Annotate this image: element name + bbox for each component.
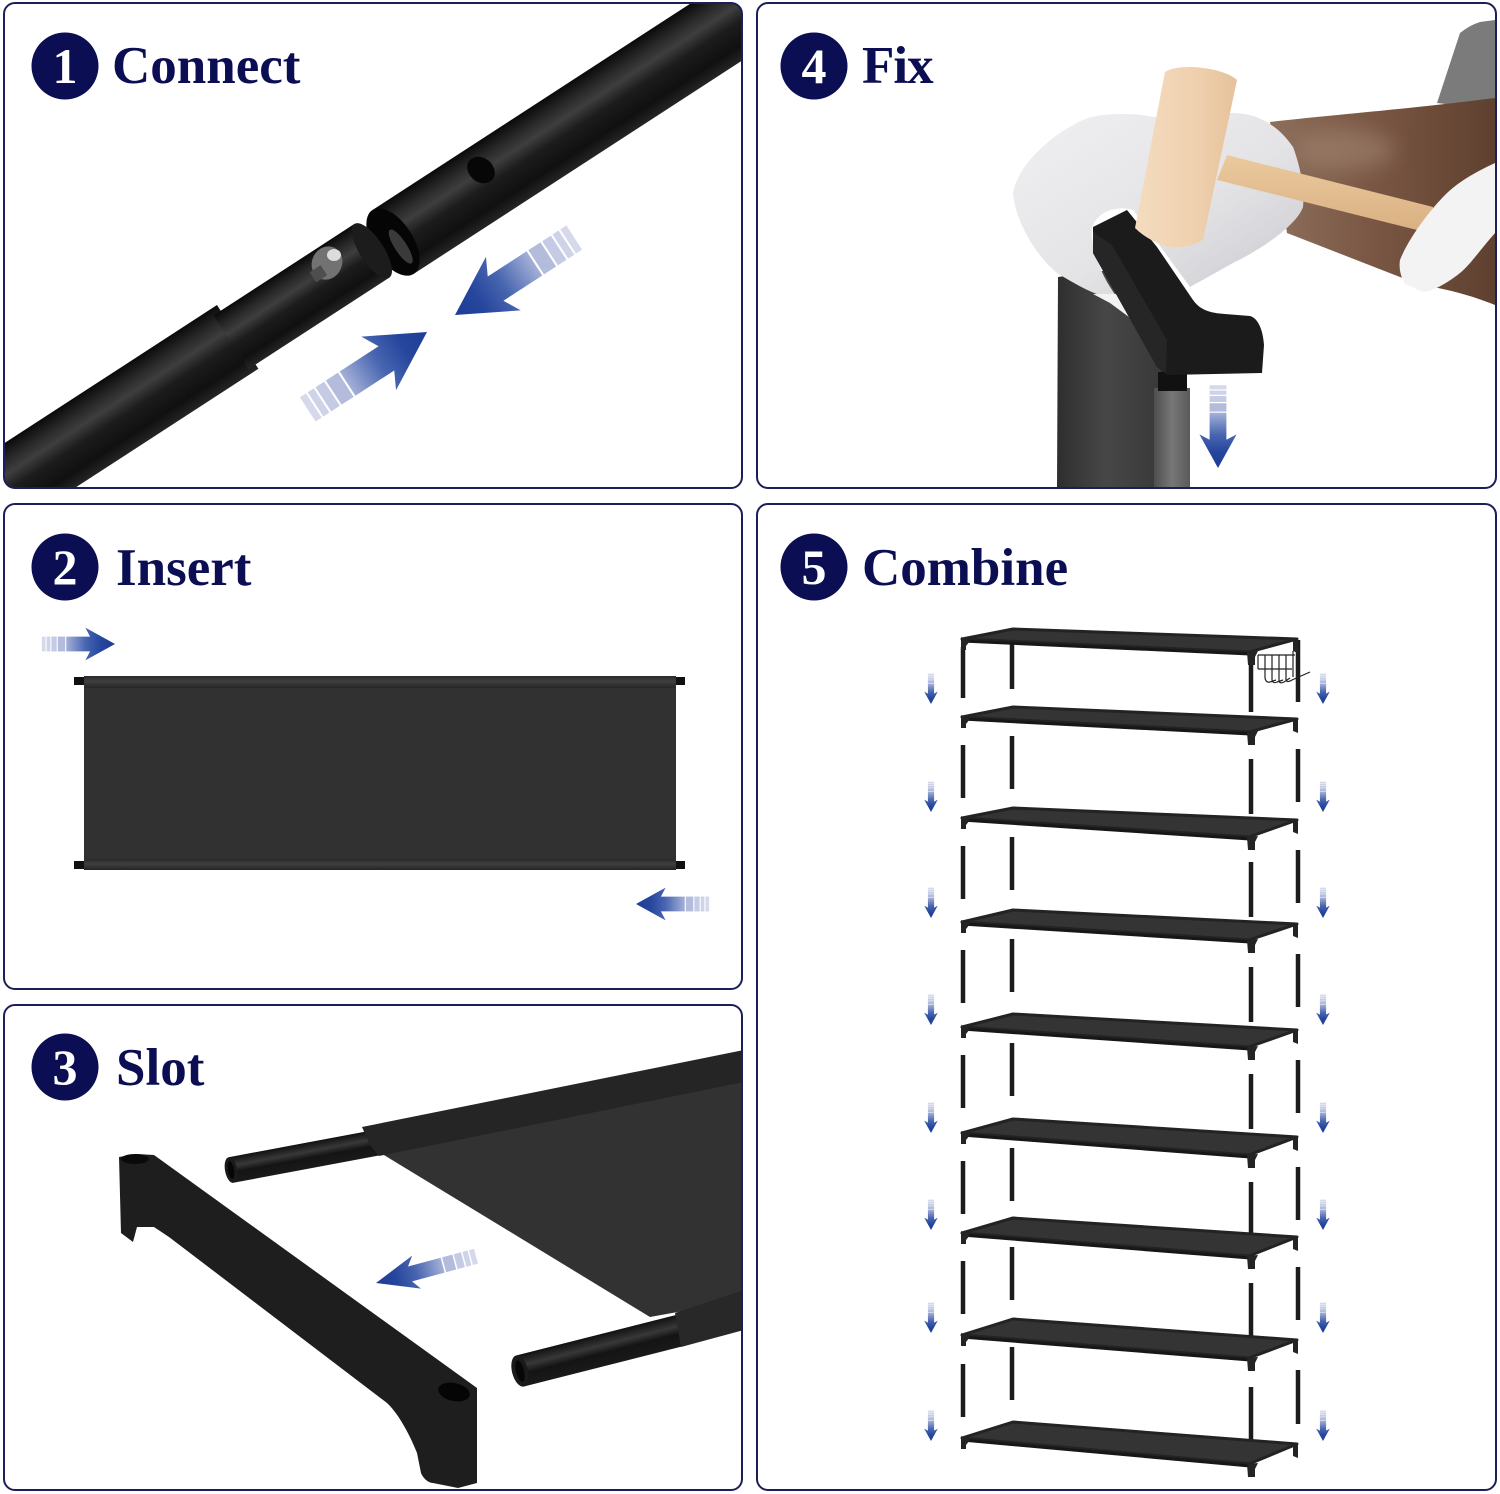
shelf 7 bbox=[961, 1218, 1298, 1269]
arrow: pointing up right bbox=[290, 305, 444, 436]
step number 2 bbox=[32, 534, 98, 600]
forearm highlight bbox=[1295, 130, 1395, 170]
arrow: pointing left bbox=[372, 1240, 480, 1299]
step number 3: 3 bbox=[52, 1039, 78, 1095]
panel 3: slot bbox=[4, 1005, 744, 1490]
connecting tube bbox=[0, 0, 766, 533]
arrow: pointing right bbox=[42, 628, 115, 660]
frame bbox=[4, 3, 742, 488]
shelf 5 bbox=[961, 1014, 1298, 1060]
shelf 8 bbox=[961, 1319, 1298, 1371]
hammer head bbox=[1135, 67, 1237, 247]
frame bbox=[757, 3, 1496, 488]
frame bbox=[757, 504, 1496, 1490]
end bar bbox=[119, 1154, 477, 1488]
top shelf bbox=[961, 629, 1298, 665]
poles 4 bbox=[963, 939, 1298, 1022]
poles 2 bbox=[963, 736, 1298, 814]
panel 2: insert bbox=[4, 504, 742, 989]
arrow: pointing down bbox=[1199, 385, 1237, 468]
middle tube bbox=[214, 223, 392, 364]
poles 3 bbox=[963, 837, 1298, 917]
frame bbox=[4, 504, 742, 989]
top rail bbox=[84, 676, 676, 688]
lower rod bbox=[508, 1314, 687, 1388]
poles 6 bbox=[963, 1148, 1298, 1237]
grey sleeve bbox=[1437, 20, 1495, 110]
arrow: pointing down left bbox=[438, 211, 592, 342]
top rod caps bbox=[74, 677, 685, 685]
frame bbox=[4, 1005, 742, 1490]
shelf 2 bbox=[961, 707, 1298, 745]
lower tube bbox=[5, 305, 258, 487]
upper rail bbox=[362, 1050, 744, 1156]
step number 5 bbox=[780, 534, 848, 600]
heading: Combine: Combine bbox=[862, 539, 1068, 597]
exploded shelf rack bbox=[961, 629, 1310, 1477]
heading: Connect: Connect bbox=[112, 37, 301, 95]
upper rod bbox=[223, 1130, 379, 1184]
panel 1: connect bbox=[0, 0, 766, 533]
poles 8 bbox=[963, 1347, 1298, 1441]
corner piece side face bbox=[1093, 232, 1167, 373]
step number 1: 1 bbox=[52, 38, 78, 94]
shelf fabric panel bbox=[74, 676, 685, 870]
step number 1 bbox=[32, 32, 98, 100]
top shelf poles bbox=[963, 640, 1298, 712]
hammer handle bbox=[1217, 155, 1433, 232]
left down arrows bbox=[924, 674, 938, 1441]
tube hole bbox=[467, 156, 495, 184]
shelf 3 bbox=[961, 808, 1298, 850]
heading: Insert: Insert bbox=[116, 539, 252, 597]
screw bbox=[310, 246, 342, 282]
bottom rod caps bbox=[74, 861, 685, 869]
sleeve opening bbox=[366, 208, 420, 276]
right glove bbox=[1400, 163, 1495, 292]
shelf and rods bbox=[119, 1050, 744, 1488]
textured pole bbox=[1154, 388, 1190, 488]
fabric side panel bbox=[1057, 270, 1165, 488]
step number 2: 2 bbox=[52, 539, 78, 595]
step number 3 bbox=[32, 1034, 98, 1100]
hammering illustration bbox=[1013, 20, 1495, 488]
shelf 4 bbox=[961, 910, 1298, 953]
heading: Slot: Slot bbox=[116, 1039, 205, 1097]
upper tube bbox=[372, 0, 766, 274]
step number 5: 5 bbox=[802, 539, 826, 595]
shelf 6 bbox=[961, 1119, 1298, 1168]
right down arrows bbox=[1316, 674, 1330, 1441]
forearm bbox=[1270, 98, 1495, 305]
fabric bbox=[384, 1082, 741, 1317]
hook rack bbox=[1258, 651, 1310, 683]
pole sleeve bbox=[1158, 372, 1187, 391]
arrow: pointing left bbox=[636, 888, 709, 920]
bottom rail bbox=[84, 859, 676, 870]
step number 4: 4 bbox=[802, 38, 826, 94]
poles 5 bbox=[963, 1043, 1298, 1129]
glove cuff tip bbox=[1093, 294, 1129, 317]
panel 5: combine bbox=[757, 504, 1496, 1490]
step number 4 bbox=[780, 32, 848, 100]
heading: Fix: Fix bbox=[862, 37, 934, 95]
bottom shelf bbox=[961, 1422, 1298, 1477]
black corner piece bbox=[1093, 210, 1264, 375]
poles 7 bbox=[963, 1247, 1298, 1338]
panel 4: fix bbox=[757, 3, 1496, 488]
left glove bbox=[1013, 113, 1303, 298]
lower rail bbox=[675, 1290, 744, 1347]
